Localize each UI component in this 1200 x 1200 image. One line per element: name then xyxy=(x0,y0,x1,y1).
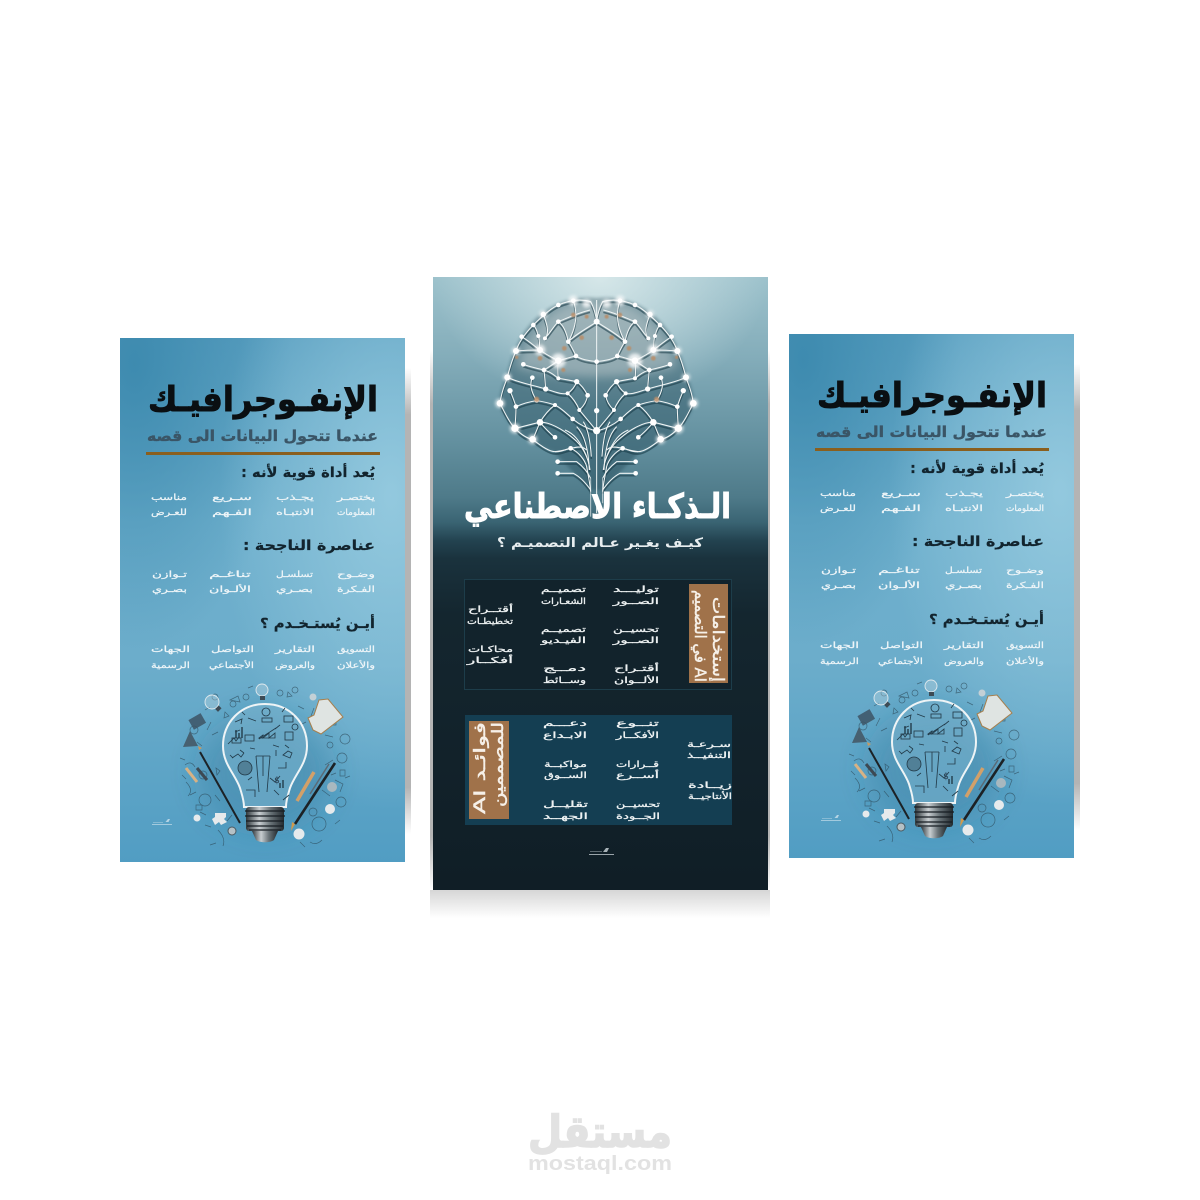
benefits list: أســرع xyxy=(616,769,659,781)
benefits list: الســوق xyxy=(544,771,587,781)
benefits list: الجهــد xyxy=(543,812,588,822)
center poster background xyxy=(433,277,768,890)
list: elements xyxy=(821,566,1044,591)
uses list xyxy=(465,585,660,686)
list: uses: التسويق xyxy=(1006,641,1044,651)
notes pad xyxy=(308,699,343,734)
uses list: تحسيــن xyxy=(613,625,660,635)
uses list: الشعـارات xyxy=(541,597,586,607)
dark marker xyxy=(197,768,207,780)
uses list: أقتــراح xyxy=(468,603,513,615)
uses label badge xyxy=(689,584,728,683)
list: elements: بصـري xyxy=(945,581,982,591)
list: reasons: مناسب xyxy=(151,493,187,503)
divider line xyxy=(815,448,1049,451)
glass bulb xyxy=(223,704,307,807)
list: reasons: للعـرض xyxy=(151,508,187,518)
list: elements: تسلسـل xyxy=(945,566,983,576)
benefits label badge: للمصممين xyxy=(488,722,508,807)
list: reasons: للعـرض xyxy=(820,504,856,514)
book xyxy=(188,713,206,730)
benefits list xyxy=(543,719,732,822)
list: uses: الأجتماعي xyxy=(878,656,923,667)
dollar sign: $ xyxy=(274,776,280,786)
panel: center AI poster xyxy=(430,277,770,918)
title: الـذكـاء الاصطناعي xyxy=(464,487,731,527)
uses box outline xyxy=(464,580,732,690)
illustration: light bulb with doodles xyxy=(180,684,350,847)
uses list: الصــور xyxy=(611,597,659,607)
list: uses: الجهات xyxy=(151,645,190,655)
title: الإنفـوجرافيـك xyxy=(817,376,1047,416)
right poster background xyxy=(789,334,1074,858)
benefits box background xyxy=(465,715,732,825)
list: reasons: الانتبـاه xyxy=(945,504,983,514)
uses list: الفيـديو xyxy=(539,636,586,646)
list: uses: والعروض xyxy=(275,661,315,671)
center poster side shadows and reflection xyxy=(430,350,770,918)
panel: left infographic poster xyxy=(120,338,411,862)
watermark: mostaql logo: مستقل xyxy=(528,1107,672,1158)
list: reasons: سـريع xyxy=(881,489,921,499)
list: reasons: الفـهم xyxy=(212,508,252,518)
uses list: أقتـراح xyxy=(614,662,659,674)
list: reasons: الفـهم xyxy=(881,504,921,514)
uses list: تصميــم xyxy=(541,585,587,595)
list: elements: الفـكرة xyxy=(1006,581,1044,591)
benefits label badge xyxy=(469,721,509,819)
illustration: light bulb with doodles xyxy=(849,680,1019,843)
list: uses: التسويق xyxy=(337,645,375,655)
uses label badge: AI في التصميم xyxy=(690,590,710,682)
doodles inside bulb xyxy=(228,708,298,800)
title: الإنفـوجرافيـك xyxy=(148,380,378,420)
small logo xyxy=(589,848,614,855)
list: elements: الألـوان xyxy=(878,580,920,591)
list: elements: تناغـم xyxy=(209,570,252,580)
uses list: دمــج xyxy=(543,664,586,674)
list: reasons: يختصـر xyxy=(335,493,376,503)
orange pencil xyxy=(297,772,314,801)
list: uses xyxy=(820,641,1044,667)
small gear xyxy=(228,827,236,835)
list: elements: تسلسـل xyxy=(276,570,314,580)
uses label badge: إستخدامات xyxy=(709,597,728,682)
heading: why powerful: يُعد أداة قوية لأنه : xyxy=(910,459,1044,477)
left poster side shadow xyxy=(405,368,411,834)
list: elements: تـوازن xyxy=(152,570,188,580)
heading: where used: أيـن يُستـخـدم ؟ xyxy=(929,610,1044,628)
uses list: الصــور xyxy=(611,636,659,646)
list: uses: الجهات xyxy=(820,641,859,651)
benefits list: زيــادة xyxy=(688,781,732,791)
list: reasons: مناسب xyxy=(820,489,856,499)
list: reasons: المعلومات xyxy=(1006,504,1044,514)
list: elements: وضـوح xyxy=(1006,566,1044,576)
list: uses xyxy=(151,645,375,671)
triangle xyxy=(183,731,198,747)
list: uses: التواصل xyxy=(211,645,254,655)
panel: AI uses in design xyxy=(464,580,732,690)
panel: right infographic poster xyxy=(789,334,1080,858)
list: elements: الفـكرة xyxy=(337,585,375,595)
benefits list: الأفكــار xyxy=(614,730,659,741)
list: uses: التواصل xyxy=(880,641,923,651)
illustration: circuit brain xyxy=(495,296,698,517)
right pen xyxy=(291,763,335,831)
watermark: mostaql logo: mostaql.com xyxy=(528,1153,672,1175)
list: reasons: يختصـر xyxy=(1004,489,1045,499)
list: uses: التقارير xyxy=(273,645,315,655)
uses list: الألــوان xyxy=(614,675,659,686)
uses list: تصميــم xyxy=(541,625,587,635)
heading: success elements: عناصرة الناجحة : xyxy=(243,538,375,554)
list: uses: التقارير xyxy=(942,641,984,651)
list: elements: وضـوح xyxy=(337,570,375,580)
list: uses: والأعلان xyxy=(337,660,375,671)
list: uses: الرسمية xyxy=(151,661,190,671)
list: elements: تـوازن xyxy=(821,566,857,576)
list: reasons: يجـذب xyxy=(945,489,984,499)
benefits list: مواكبــة xyxy=(544,760,587,770)
list: reasons: الانتبـاه xyxy=(276,508,314,518)
panel: AI benefits for designers xyxy=(465,715,732,825)
list: elements: بصـري xyxy=(276,585,313,595)
list: elements: بصـري xyxy=(821,581,856,591)
heading: where used: أيـن يُستـخـدم ؟ xyxy=(260,614,375,632)
subtitle: عندما تتحول البيانات الى قصه xyxy=(816,423,1047,441)
benefits label badge: فوائـد AI xyxy=(470,722,490,814)
small bulb bases xyxy=(215,696,265,712)
heading: success elements: عناصرة الناجحة : xyxy=(912,534,1044,550)
benefits list: الابـداع xyxy=(543,731,587,741)
list: reasons xyxy=(820,489,1045,514)
left pencil xyxy=(198,746,240,823)
list: elements: بصـري xyxy=(152,585,187,595)
benefits list: دعـــم xyxy=(543,719,587,729)
list: reasons: سـريع xyxy=(212,493,252,503)
benefits list: سـرعـة xyxy=(687,740,731,750)
surrounding doodles xyxy=(180,686,350,847)
small bulbs xyxy=(205,684,268,709)
list: uses: والعروض xyxy=(944,657,984,667)
small logo xyxy=(821,815,841,821)
list: elements: الألـوان xyxy=(209,584,251,595)
divider line xyxy=(146,452,380,455)
list: uses: والأعلان xyxy=(1006,656,1044,667)
list: elements: تناغـم xyxy=(878,566,921,576)
uses list: وســائط xyxy=(543,676,586,686)
benefits list: التنفيــذ xyxy=(687,751,731,761)
benefits list: قــرارات xyxy=(616,760,659,770)
heading: why powerful: يُعد أداة قوية لأنه : xyxy=(241,463,375,481)
uses list: محاكـات xyxy=(468,645,513,655)
list: reasons: المعلومات xyxy=(337,508,375,518)
list: reasons xyxy=(151,493,376,518)
subtitle: عندما تتحول البيانات الى قصه xyxy=(147,427,378,445)
list: uses: الأجتماعي xyxy=(209,660,254,671)
list: reasons: يجـذب xyxy=(276,493,315,503)
watermark: mostaql logo xyxy=(528,1107,672,1175)
benefits list: تنــوع xyxy=(616,719,660,729)
cream marker xyxy=(186,768,197,782)
subtitle: كيـف يغـير عـالم التصميـم ؟ xyxy=(497,536,704,551)
benefits list: الأنتاجيــة xyxy=(688,791,732,802)
uses list: تخطيطـات xyxy=(467,617,514,627)
small logo xyxy=(152,819,172,825)
uses list: توليـــد xyxy=(613,585,660,595)
benefits list: الجــودة xyxy=(616,812,660,822)
screw base xyxy=(245,807,285,842)
benefits list: تقليــل xyxy=(543,800,589,810)
list: elements xyxy=(152,570,375,595)
right poster side shadow xyxy=(1074,364,1080,830)
list: uses: الرسمية xyxy=(820,657,859,667)
spheres and puzzle xyxy=(194,694,337,840)
left poster background xyxy=(120,338,405,862)
benefits list: تحسيــن xyxy=(616,800,661,810)
uses list: أفكــار xyxy=(465,654,513,666)
